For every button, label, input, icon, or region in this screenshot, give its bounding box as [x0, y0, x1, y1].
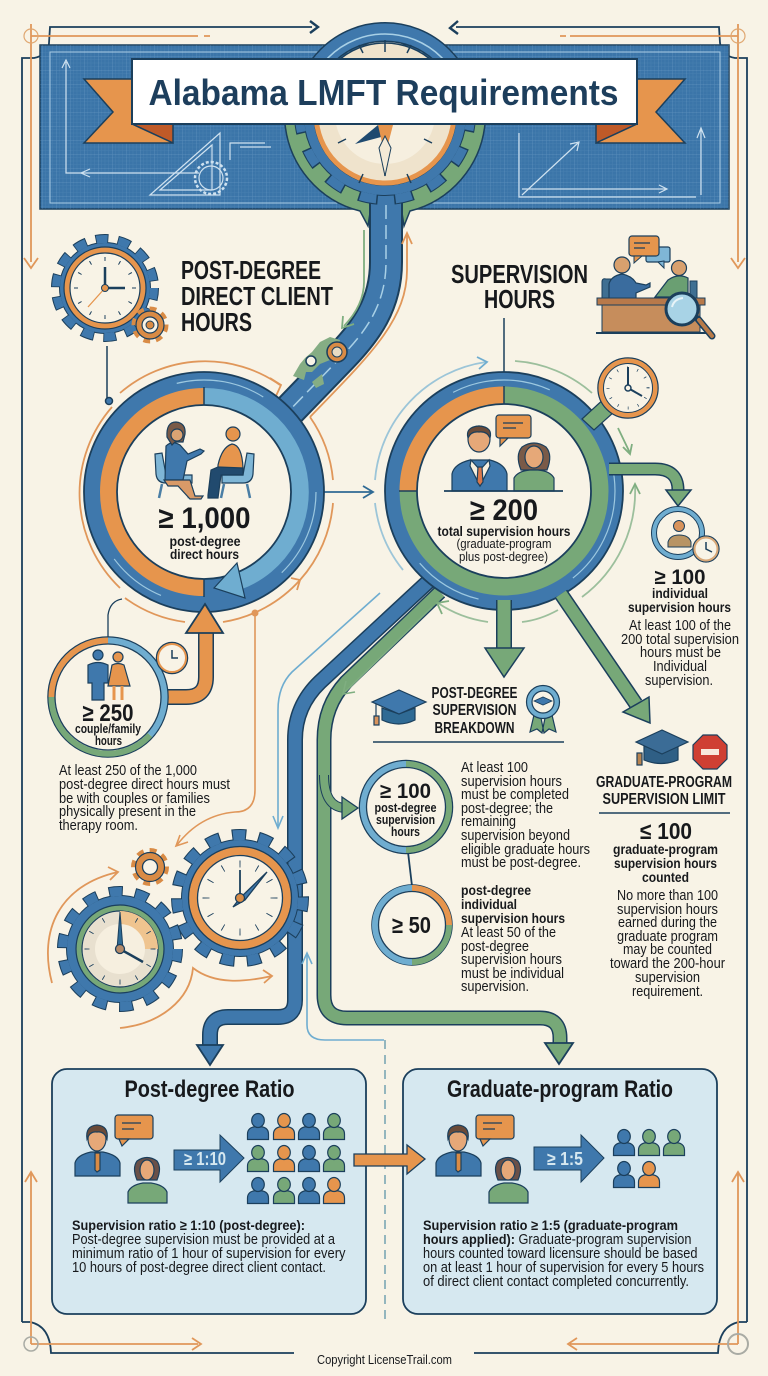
value text: ≥ 1,000: [158, 502, 250, 535]
road to lower panels: blue: [197, 580, 430, 1065]
icon: graduation cap and stop sign: [636, 730, 727, 769]
copyright: Copyright LicenseTrail.com: [317, 1352, 452, 1367]
icon: supervisee: [489, 1158, 528, 1203]
text: individual supervision: supervision hours: [628, 599, 731, 615]
value text: direct hours: [170, 546, 239, 562]
text: post-degree supervision note: At least 100: [461, 760, 528, 776]
icon: supervision desk with magnifier: [596, 236, 712, 336]
panel body text: on at least 1 hour of supervision for every 5 hours: [423, 1260, 704, 1276]
heading: post-degree direct client hours: DIRECT CLIENT: [181, 283, 333, 311]
panel: post-degree ratio: [52, 1069, 366, 1314]
value text: (graduate-program: [456, 536, 552, 551]
text: post-degree supervision note: must be post-degree.: [461, 855, 581, 871]
ring: post-degree direct hours: [84, 372, 324, 612]
title text: Alabama LMFT Requirements: [148, 72, 618, 113]
text: couple hours note: post-degree direct hours must: [59, 777, 230, 793]
circle: post-degree individual hours: ≥ 50: [392, 912, 431, 938]
text: post-degree individual note: post-degree: [461, 882, 531, 898]
text: post-degree individual note: [461, 882, 565, 995]
panel body text: minimum ratio of 1 hour of supervision for every: [72, 1246, 346, 1262]
icon: large gear clock: [177, 835, 303, 961]
circle: post-degree supervision hours: supervision: [376, 813, 435, 827]
value text: ≥ 250: [82, 700, 134, 727]
central road from compass: [285, 195, 386, 415]
text: graduate-program limit: supervision hours: [614, 855, 717, 871]
value text: [75, 700, 141, 748]
icon: small gear: [135, 852, 165, 882]
icon: medal: [526, 686, 560, 733]
panel body text: hours counted toward licensure should be based: [423, 1246, 698, 1262]
panel body text: of direct client contact completed concurrently.: [423, 1274, 689, 1290]
compass gear emblem: [300, 28, 470, 200]
ribbon right: [596, 79, 685, 143]
text: post-degree individual note: At least 50 of the: [461, 925, 556, 941]
heading: post-degree supervision breakdown: POST-DEGREE: [432, 685, 518, 702]
orbit arcs around left ring: [80, 361, 333, 622]
panel: graduate-program ratio: [403, 1069, 717, 1314]
green arrow to individual hours: [609, 469, 691, 506]
text: individual supervision: Individual: [653, 659, 707, 675]
text: post-degree supervision note: post-degree; the: [461, 801, 553, 817]
icon: couple: [88, 650, 130, 700]
text: graduate-program limit: earned during the: [618, 915, 717, 931]
text: post-degree supervision note: [461, 760, 590, 871]
icon: supervisor with speech bubble: [436, 1115, 514, 1176]
arrow: ratio 1:10: [174, 1135, 244, 1182]
panel title: Post-degree Ratio: [124, 1076, 294, 1103]
small orange gear: [135, 310, 165, 340]
panel body text: 10 hours of post-degree direct client contact.: [72, 1260, 326, 1276]
circle: couple/family hours: [48, 637, 168, 757]
value text: total supervision hours: [438, 523, 571, 539]
icon: supervisor and supervisee: [444, 415, 563, 491]
heading: graduate-program supervision limit: GRADUATE-PROGRAM: [596, 774, 732, 791]
arrow between rings: [323, 486, 373, 498]
text: post-degree supervision note: remaining: [461, 814, 516, 830]
green collar under compass: [285, 124, 485, 226]
text: post-degree supervision note: supervision hours: [461, 774, 562, 790]
road to lower panels: green: [324, 592, 573, 1064]
text: post-degree individual note: supervision hours: [461, 910, 565, 926]
text: graduate-program limit: supervision hours: [617, 902, 718, 918]
text: post-degree individual note: post-degree: [461, 939, 529, 955]
panel body text: [72, 1217, 346, 1276]
icon: clock on right ring: [582, 358, 658, 430]
text: individual supervision: At least 100 of the: [629, 618, 731, 634]
text: individual supervision: individual: [652, 585, 708, 601]
green diagonal arrow to limit: [561, 594, 650, 723]
text: individual supervision: supervision.: [645, 673, 713, 689]
ring: total supervision hours: [385, 372, 623, 610]
text: graduate-program limit: [610, 818, 725, 1000]
text: graduate-program limit: graduate program: [617, 929, 718, 945]
text: graduate-program limit: supervision: [635, 970, 700, 986]
panel body text: Supervision ratio ≥ 1:10 (post-degree):: [72, 1217, 305, 1233]
circle: post-degree supervision hours: hours: [391, 825, 420, 839]
heading: post-degree direct client hours: HOURS: [181, 309, 252, 337]
text: graduate-program limit: graduate-program: [613, 841, 718, 857]
panel body text: hours applied):: [423, 1231, 515, 1247]
icon: individual supervision: [654, 509, 719, 562]
road decoration: gear and foliage: [293, 337, 347, 388]
value text: [158, 502, 250, 562]
connector lines from headings: [106, 318, 504, 404]
text: individual supervision: hours must be: [640, 645, 721, 661]
arrow: ratio 1:10: ≥ 1:10: [184, 1149, 226, 1169]
heading: post-degree direct client hours: POST-DEGREE: [181, 257, 321, 285]
panel title: Graduate-program Ratio: [447, 1076, 673, 1103]
heading: supervision hours: SUPERVISION: [451, 261, 588, 289]
heading: supervision hours: HOURS: [484, 286, 555, 314]
circle: post-degree supervision hours: post-degree: [374, 801, 437, 815]
text: graduate-program limit: ≤ 100: [640, 818, 692, 844]
text: graduate-program limit: toward the 200-hour: [610, 956, 725, 972]
orange orbit arrows around gears: [48, 867, 272, 1028]
text: post-degree individual note: individual: [461, 896, 517, 912]
text: post-degree individual note: supervision hours: [461, 952, 562, 968]
icon: therapist and client: [155, 422, 254, 499]
text: couple hours note: At least 250 of the 1,000: [59, 763, 197, 779]
icon: graduation cap: [372, 690, 426, 725]
ribbon left: [84, 79, 173, 143]
text: individual supervision: 200 total supervision: [621, 632, 739, 648]
text: graduate-program limit: counted: [642, 869, 689, 885]
heading: post-degree direct client hours: [181, 257, 333, 337]
heading: graduate-program supervision limit: SUPERVISION LIMIT: [602, 791, 726, 808]
orange arrow from couple circle: [167, 604, 223, 697]
text: couple hours note: physically present in the: [59, 804, 196, 820]
text: individual supervision: ≥ 100: [654, 566, 706, 589]
text: post-degree individual note: must be individual: [461, 966, 564, 982]
panel body text: Post-degree supervision must be provided at a: [72, 1232, 335, 1248]
panel body text: [423, 1217, 704, 1290]
green arrow down to breakdown: [485, 600, 524, 677]
orbit arcs around right ring: [375, 357, 640, 622]
thin guide lines along roads: [108, 593, 432, 1325]
heading: supervision hours: [451, 261, 588, 314]
panel body text: Supervision ratio ≥ 1:5 (graduate-program: [423, 1217, 678, 1233]
value text: hours: [95, 734, 122, 748]
panel body text: Graduate-program supervision: [518, 1232, 692, 1248]
blueprint header panel: [40, 45, 729, 209]
green arrow to post-degree circle: [324, 775, 358, 819]
circle: post-degree supervision hours: ≥ 100: [380, 780, 431, 803]
arrow: ratio 1:5: [534, 1135, 604, 1182]
arrow: ratio 1:5: ≥ 1:5: [547, 1149, 583, 1169]
value text: couple/family: [75, 722, 141, 736]
text: graduate-program limit: may be counted: [623, 942, 712, 958]
heading: post-degree supervision breakdown: BREAKDOWN: [434, 720, 514, 737]
heading: post-degree supervision breakdown: [432, 685, 518, 737]
text: post-degree individual note: supervision.: [461, 979, 529, 995]
text: individual supervision: [621, 566, 739, 689]
icon: supervisor with speech bubble: [75, 1115, 153, 1176]
text: couple hours note: therapy room.: [59, 818, 138, 834]
arrow between panels: [354, 1145, 425, 1174]
icon: supervisee group of twelve: [248, 1114, 344, 1204]
value text: ≥ 200: [470, 494, 538, 527]
thin guide lines beside road: [310, 230, 412, 417]
icon: supervisee: [128, 1158, 167, 1203]
text: graduate-program limit: requirement.: [632, 984, 703, 1000]
heading: graduate-program supervision limit: [596, 774, 732, 808]
circle: post-degree individual hours: [372, 885, 452, 965]
value text: plus post-degree): [459, 549, 548, 564]
heading: post-degree supervision breakdown: SUPERVISION: [432, 702, 516, 719]
value text: post-degree: [170, 533, 241, 549]
text: couple hours note: be with couples or families: [59, 791, 210, 807]
text: couple hours note: [59, 763, 230, 834]
text: post-degree supervision note: supervision beyond: [461, 828, 570, 844]
text: post-degree supervision note: must be completed: [461, 787, 569, 803]
icon: small clock by couple circle: [156, 642, 188, 674]
top left clock gear icon: [56, 239, 165, 340]
text: post-degree supervision note: eligible graduate hours: [461, 842, 590, 858]
icon: left gear clock: [62, 892, 178, 1006]
text: graduate-program limit: No more than 100: [617, 888, 718, 904]
value text: [438, 494, 571, 564]
circle: post-degree supervision hours: [360, 760, 452, 854]
icon: supervisee group of five: [614, 1130, 684, 1188]
title banner: [84, 59, 685, 143]
